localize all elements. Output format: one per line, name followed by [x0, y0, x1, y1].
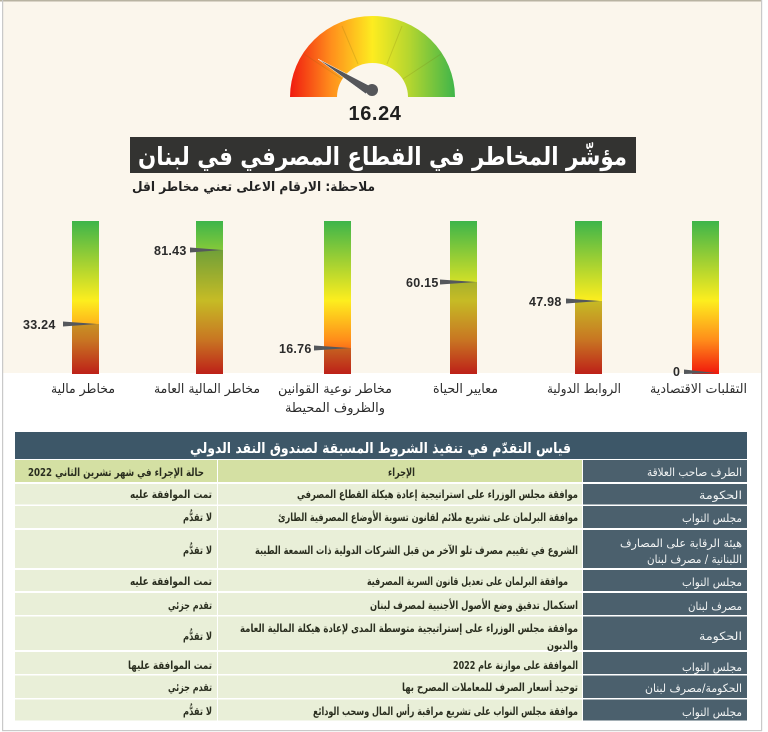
- row 6: والديون: [547, 639, 578, 652]
- gauge needle: [318, 59, 378, 96]
- row 2: لا تقدُّم: [183, 509, 212, 524]
- row 2: مجلس النواب: [682, 511, 742, 526]
- column headers: حالة الإجراء في شهر تشرين الثاني 2022: [28, 466, 204, 479]
- row 2: موافقة البرلمان على تشريع ملائم لقانون تسوية الأوضاع المصرفية الطارئ: [278, 510, 578, 524]
- row 6: الحكومة: [699, 629, 742, 644]
- bar: living standards: 60.15: [406, 276, 439, 290]
- gauge: [290, 16, 455, 97]
- row 8: تقدم جزئي: [168, 681, 212, 694]
- row 3: لا تقدُّم: [183, 542, 212, 557]
- table heading: [15, 432, 747, 459]
- bar: laws and environment risks: والظروف المحيطة: [285, 401, 385, 416]
- bar: economic fluctuations: التقلبات الاقتصادية: [650, 382, 747, 397]
- bar: financial risks: [23, 221, 115, 397]
- title: مؤشّر المخاطر في القطاع المصرفي في لبنان: [138, 142, 627, 172]
- row 7: مجلس النواب: [682, 660, 742, 675]
- row 5: [15, 593, 747, 615]
- bar: public finance risks: مخاطر المالية العامة: [154, 382, 260, 397]
- row 9: [15, 700, 747, 720]
- bar: living standards: معايير الحياة: [433, 382, 498, 397]
- bar: laws and environment risks: 16.76: [279, 342, 312, 356]
- bar: economic fluctuations: [650, 221, 747, 397]
- bar: living standards: [406, 221, 498, 397]
- bar: public finance risks: 81.43: [154, 244, 187, 258]
- row 3: اللبنانية / مصرف لبنان: [647, 552, 742, 567]
- gauge value: 16.24: [348, 103, 402, 125]
- row 1: تمت الموافقة عليه: [130, 488, 212, 501]
- row 8: الحكومة/مصرف لبنان: [645, 681, 742, 696]
- table: IMF prior actions: [15, 432, 747, 720]
- bar: public finance risks: [154, 221, 260, 397]
- bar: laws and environment risks: [278, 221, 392, 416]
- row 1: [15, 484, 747, 504]
- row 3: هيئة الرقابة على المصارف: [620, 536, 742, 551]
- row 7: تمت الموافقة عليها: [128, 659, 212, 672]
- row 5: مصرف لبنان: [688, 599, 742, 614]
- title banner: [130, 137, 636, 173]
- row 5: استكمال تدقيق وضع الأصول الأجنبية لمصرف لبنان: [370, 598, 578, 612]
- row 9: مجلس النواب: [682, 705, 742, 720]
- column headers: [15, 460, 747, 482]
- row 1: موافقة مجلس الوزراء على استراتيجية إعادة هيكلة القطاع المصرفي: [297, 488, 578, 501]
- row 4: موافقة البرلمان على تعديل قانون السرية المصرفية: [367, 575, 568, 588]
- note: ملاحظة: الارقام الاعلى تعني مخاطر اقل: [132, 180, 375, 195]
- row 6: موافقة مجلس الوزراء على إستراتيجية متوسطة المدى لإعادة هيكلة المالية العامة: [240, 622, 578, 635]
- row 7: [15, 652, 747, 675]
- row 4: مجلس النواب: [682, 575, 742, 590]
- row 7: الموافقة على موازنة عام 2022: [453, 659, 578, 672]
- column headers: الطرف صاحب العلاقة: [647, 465, 742, 480]
- gauge arc: [290, 16, 455, 97]
- row 9: لا تقدُّم: [183, 703, 212, 718]
- row 6: [15, 616, 747, 652]
- row 9: موافقة مجلس النواب على تشريع مراقبة رأس المال وسحب الودائع: [313, 704, 578, 718]
- bar: financial risks: 33.24: [23, 318, 56, 332]
- column headers: الإجراء: [388, 466, 415, 479]
- row 1: الحكومة: [699, 488, 742, 503]
- bar: international links: الروابط الدولية: [547, 382, 621, 397]
- bar: international links: [529, 221, 621, 397]
- bar chart: risk indicators: [23, 221, 747, 416]
- row 5: تقدم جزئي: [168, 599, 212, 612]
- row 4: [15, 570, 747, 591]
- row 2: [15, 506, 747, 528]
- bar: laws and environment risks: مخاطر نوعية القوانين: [278, 382, 392, 397]
- bar: financial risks: مخاطر مالية: [51, 382, 115, 397]
- row 4: تمت الموافقة عليه: [130, 575, 212, 588]
- bar: economic fluctuations: 0: [673, 365, 680, 379]
- bar: international links: 47.98: [529, 295, 562, 309]
- table heading: قياس التقدّم في تنفيذ الشروط المسبقة لصندوق النقد الدولي: [190, 441, 571, 457]
- row 6: لا تقدُّم: [183, 628, 212, 643]
- row 8: [15, 676, 747, 698]
- row 8: توحيد أسعار الصرف للمعاملات المصرح بها: [402, 680, 578, 694]
- row 3: [15, 530, 747, 568]
- row 3: الشروع في تقييم مصرف تلو الآخر من قبل الشركات الدولية ذات السمعة الطيبة: [255, 544, 578, 557]
